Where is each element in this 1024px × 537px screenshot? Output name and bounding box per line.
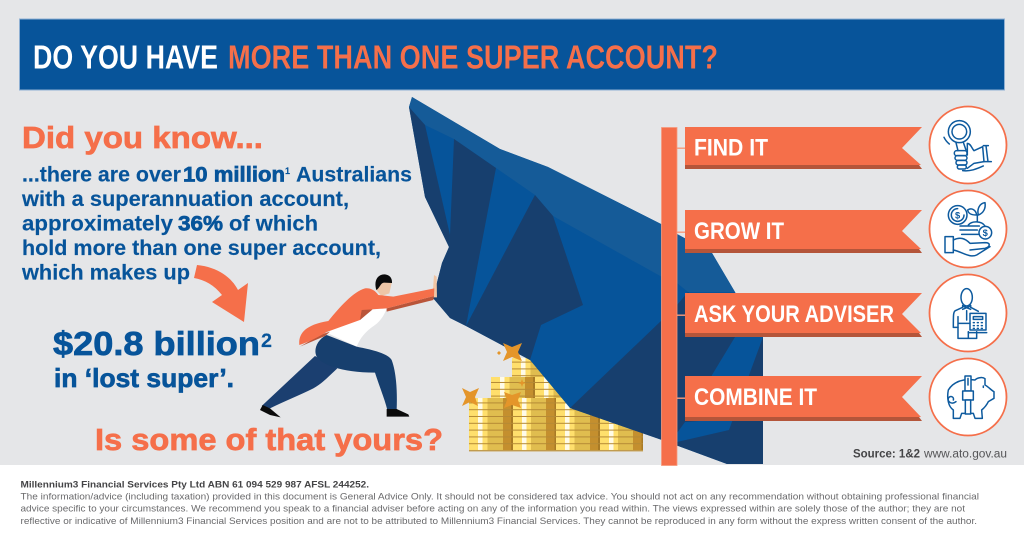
ribbon: combine it: COMBINE IT bbox=[694, 384, 817, 411]
hand bbox=[433, 275, 437, 297]
icon: adviser with calculator bbox=[930, 274, 1006, 352]
line 1: 1 bbox=[285, 166, 290, 176]
icon: magnifier in hand bbox=[930, 106, 1006, 184]
big figure: $20.8 billion: $20.8 billion bbox=[53, 325, 260, 362]
boulder bbox=[409, 97, 763, 464]
facet dark lower bbox=[570, 320, 662, 440]
figure: man pushing boulder bbox=[260, 274, 437, 417]
line 3 bbox=[22, 212, 318, 236]
gold coin stacks bbox=[469, 358, 643, 452]
shirt bbox=[327, 308, 387, 347]
title text: orange part: MORE THAN ONE SUPER ACCOUNT? bbox=[228, 40, 718, 76]
icon: money plant on hand bbox=[930, 190, 1006, 268]
facet dark right bbox=[662, 292, 735, 433]
line 1: Australians bbox=[296, 164, 412, 186]
arrow: curved down bbox=[194, 265, 248, 322]
title text: white part: DO YOU HAVE bbox=[33, 40, 218, 76]
question: is some of that yours: Is some of that yours? bbox=[95, 422, 443, 457]
company line: Millennium3 Financial Services Pty Ltd ABN 61 094 529 987 AFSL 244252. bbox=[20, 480, 369, 490]
boulder base bbox=[409, 97, 763, 464]
facet dark base bbox=[662, 337, 763, 464]
line 1: 10 million bbox=[183, 164, 285, 186]
dollar sign, right coin: $ bbox=[983, 228, 989, 238]
ribbon: grow it bbox=[685, 210, 922, 253]
front shoe bbox=[387, 409, 409, 417]
ribbon: ask your adviser: ASK YOUR ADVISER bbox=[694, 301, 894, 328]
ribbon: find it bbox=[685, 127, 922, 169]
coat and sleeve bbox=[299, 288, 434, 345]
back shoe bbox=[260, 405, 281, 417]
line 3: approximately bbox=[22, 212, 173, 236]
line 1: ...there are over bbox=[22, 164, 181, 186]
body paragraph bbox=[21, 164, 412, 284]
source note bbox=[853, 448, 1007, 460]
sleeve shadow bbox=[387, 296, 434, 312]
boulder top highlight bbox=[409, 97, 735, 292]
hair bbox=[375, 274, 392, 290]
ribbon: combine it bbox=[685, 376, 922, 421]
head bbox=[376, 282, 392, 296]
disclaimer line 3: reflective or indicative of Millennium3 Financial Services position and are not to be attributed to Millennium3 Financial Services. They cannot be reproduced in any form without the express written consent of the author. bbox=[20, 516, 977, 527]
title banner bbox=[20, 19, 1004, 90]
ribbon: grow it: GROW IT bbox=[694, 218, 784, 245]
heading: did you know: Did you know... bbox=[22, 120, 263, 155]
back leg bbox=[262, 356, 337, 408]
coat inner wedge bbox=[360, 309, 373, 320]
source note: Source: 1&2 bbox=[853, 448, 920, 460]
line 3: 36% bbox=[178, 212, 223, 236]
ribbon: find it: FIND IT bbox=[694, 134, 768, 162]
line 3: of which bbox=[229, 212, 318, 236]
line 5: which makes up bbox=[21, 262, 190, 284]
text: in lost super: in ‘lost super’. bbox=[54, 363, 234, 393]
line 4: hold more than one super account, bbox=[22, 237, 381, 260]
line 1 bbox=[22, 164, 412, 186]
icon: piggy bank with belt bbox=[930, 358, 1006, 436]
dollar sign, left coin: $ bbox=[955, 210, 961, 220]
footer background bbox=[0, 465, 1024, 537]
facet dark left bbox=[433, 139, 496, 326]
disclaimer line 2: advice specific to your circumstances. We recommend you speak to a financial adviser before acting on any of the information you read within. The views expressed within are solely those of the author; they are not bbox=[20, 504, 965, 514]
sparkles bbox=[462, 343, 526, 408]
vertical post and connectors bbox=[662, 128, 685, 466]
line 2: with a superannuation account, bbox=[21, 188, 349, 211]
footer disclaimer bbox=[20, 480, 979, 527]
disclaimer line 1: The information/advice (including taxation) provided in this document is General Advice Only. It should not be considered tax advice. You should not act on any recommendation without obtaining professional financial bbox=[20, 492, 979, 502]
big figure: $20.8 billion: 2 bbox=[261, 331, 272, 352]
coat tail shadow bbox=[300, 332, 330, 347]
source note: www.ato.gov.au bbox=[923, 448, 1007, 460]
hips and front leg bbox=[315, 335, 397, 410]
facet far left bbox=[409, 107, 450, 247]
facet dark centre bbox=[466, 195, 583, 360]
ribbon: ask your adviser bbox=[685, 293, 922, 337]
